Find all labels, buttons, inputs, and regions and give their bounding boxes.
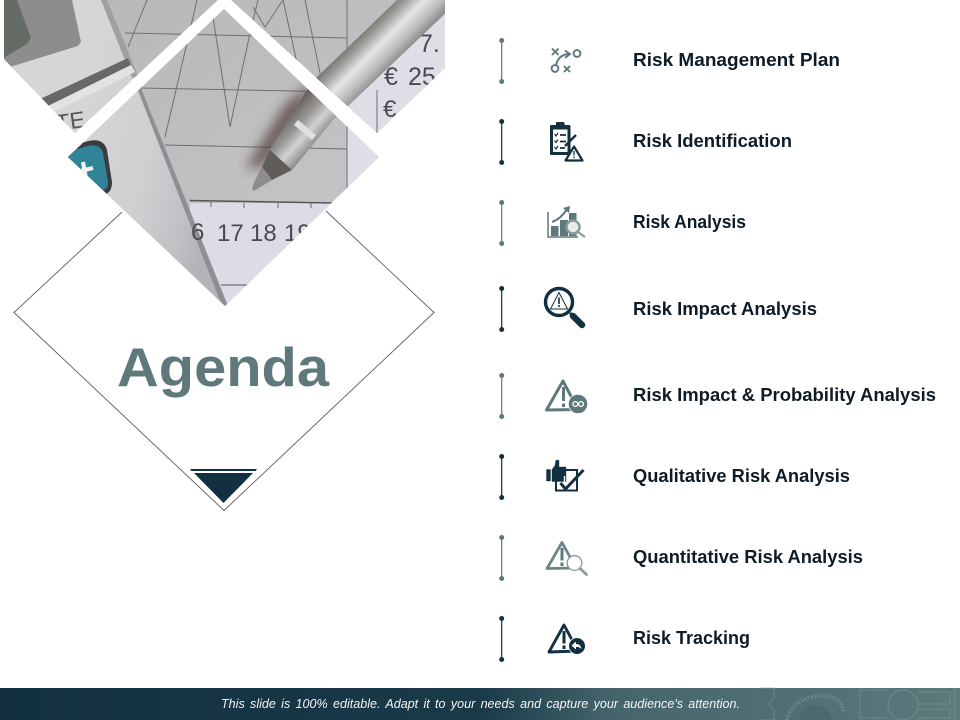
photo: calculator, chart paper and pen cut into diamonds: 25 <box>408 63 436 91</box>
agenda item 3 <box>500 200 746 246</box>
photo text: TE <box>54 106 87 136</box>
timeline connector 1 <box>500 38 504 84</box>
footer gear pattern <box>760 688 955 720</box>
label 3: Risk Analysis <box>633 212 746 232</box>
title: Agenda <box>117 336 329 398</box>
label 8: Risk Tracking <box>633 628 750 648</box>
label 5: Risk Impact & Probability Analysis <box>633 385 936 405</box>
agenda item 8 <box>500 616 750 662</box>
timeline connector 7 <box>500 536 504 580</box>
photo: calculator, chart paper and pen cut into diamonds: 7. <box>419 30 440 58</box>
pen <box>317 0 450 107</box>
agenda item 6 <box>500 454 850 500</box>
icon: checklist with warning <box>550 122 582 160</box>
agenda item 7 <box>500 536 863 580</box>
label 2: Risk Identification <box>633 131 792 151</box>
timeline connector 5 <box>500 374 504 418</box>
photo: calculator, chart paper and pen cut into diamonds: 6 <box>191 219 204 246</box>
timeline connector 8 <box>500 616 504 662</box>
photo: calculator, chart paper and pen cut into diamonds: € <box>383 96 397 123</box>
icon: downward triangle marker <box>190 469 257 503</box>
footer bar <box>0 688 960 720</box>
calculator key <box>68 140 112 194</box>
timeline connector 3 <box>500 200 504 246</box>
photo: calculator, chart paper and pen cut into diamonds: € <box>384 63 398 91</box>
footer gear hub <box>798 705 832 720</box>
calculator body <box>0 0 228 310</box>
photo: calculator, chart paper and pen cut into diamonds: 19 <box>284 220 311 247</box>
pen shadow <box>245 80 315 170</box>
icon: warning with back arrow badge <box>549 625 586 655</box>
icon: strategy plan <box>552 48 580 72</box>
icon: thumbs up and check box <box>546 460 584 490</box>
agenda item 4 <box>500 286 817 332</box>
timeline connector 4 <box>500 286 504 332</box>
agenda item 5 <box>500 374 936 418</box>
icon: bar chart with magnifier <box>548 206 585 237</box>
agenda item 2 <box>500 120 792 164</box>
photo: calculator, chart paper and pen cut into diamonds: 18 <box>250 220 277 247</box>
label 1: Risk Management Plan <box>633 50 840 70</box>
footer note: This slide is 100% editable. Adapt it to your needs and capture your audience's attention. <box>221 697 740 711</box>
label 6: Qualitative Risk Analysis <box>633 466 850 486</box>
outlined diamond panel <box>14 211 434 510</box>
photo: calculator, chart paper and pen cut into diamonds <box>0 0 450 320</box>
timeline connector 2 <box>500 120 504 164</box>
icon: warning with infinity badge <box>546 381 588 414</box>
icon: magnifier with warning <box>546 288 582 325</box>
timeline connector 6 <box>500 454 504 500</box>
label 4: Risk Impact Analysis <box>633 299 817 319</box>
photo: calculator, chart paper and pen cut into diamonds: 17 <box>217 220 244 247</box>
agenda item 1 <box>500 38 840 84</box>
icon: warning with magnifier <box>547 542 586 574</box>
label 7: Quantitative Risk Analysis <box>633 547 863 567</box>
